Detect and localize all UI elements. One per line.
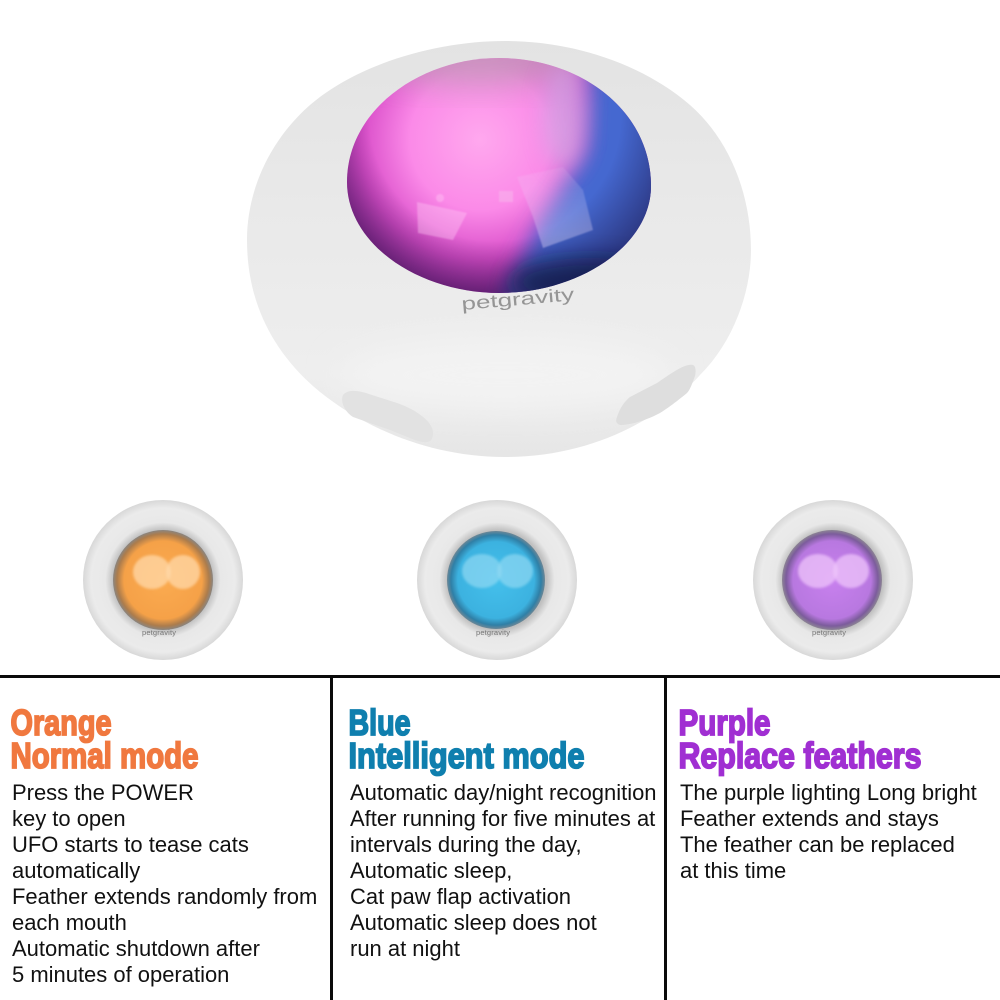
orange mode device: petgravity xyxy=(142,628,176,637)
body text: purple: The feather can be replaced xyxy=(680,832,955,857)
brand logo: petgravity xyxy=(461,284,575,314)
purple mode device: petgravity xyxy=(812,628,846,637)
body text: orange: Feather extends randomly from xyxy=(12,884,317,909)
body text: blue: run at night xyxy=(350,936,460,961)
heading: orange: Normal mode xyxy=(10,735,198,776)
body text: orange xyxy=(12,780,317,987)
body text: orange: Press the POWER xyxy=(12,780,194,805)
body text: blue xyxy=(350,780,657,961)
panel: orange normal mode xyxy=(10,702,317,987)
body text: purple: at this time xyxy=(680,858,786,883)
blue mode device: petgravity xyxy=(476,628,510,637)
body text: orange: automatically xyxy=(12,858,140,883)
heading: blue: Blue xyxy=(348,702,410,743)
body text: orange: UFO starts to tease cats xyxy=(12,832,249,857)
device body xyxy=(247,41,751,457)
heading: purple xyxy=(678,702,922,776)
body text: blue: Automatic day/night recognition xyxy=(350,780,657,805)
body text: purple: Feather extends and stays xyxy=(680,806,939,831)
body text: blue: After running for five minutes at xyxy=(350,806,655,831)
panel: purple replace feathers xyxy=(678,702,977,883)
panel: blue intelligent mode xyxy=(348,702,657,961)
feather slot right xyxy=(616,365,696,425)
colour dome xyxy=(347,58,651,293)
body text: blue: intervals during the day, xyxy=(350,832,582,857)
body text: purple: The purple lighting Long bright xyxy=(680,780,977,805)
body text: blue: Cat paw flap activation xyxy=(350,884,571,909)
heading: purple: Purple xyxy=(678,702,770,743)
body text: blue: Automatic sleep, xyxy=(350,858,512,883)
purple mode device xyxy=(753,500,913,660)
body text: orange: Automatic shutdown after xyxy=(12,936,260,961)
body text: orange: key to open xyxy=(12,806,126,831)
blue mode device xyxy=(417,500,577,660)
feather slot left xyxy=(342,391,433,442)
heading: purple: Replace feathers xyxy=(678,735,922,776)
body text: purple xyxy=(680,780,977,883)
heading: blue: Intelligent mode xyxy=(348,735,584,776)
main product: UFO cat toy xyxy=(247,36,751,457)
body text: orange: each mouth xyxy=(12,910,127,935)
heading: blue xyxy=(348,702,584,776)
window reflections xyxy=(417,167,593,248)
body text: blue: Automatic sleep does not xyxy=(350,910,597,935)
heading: orange: Orange xyxy=(10,702,112,743)
heading: orange xyxy=(10,702,198,776)
orange mode device xyxy=(83,500,243,660)
body text: orange: 5 minutes of operation xyxy=(12,962,229,987)
